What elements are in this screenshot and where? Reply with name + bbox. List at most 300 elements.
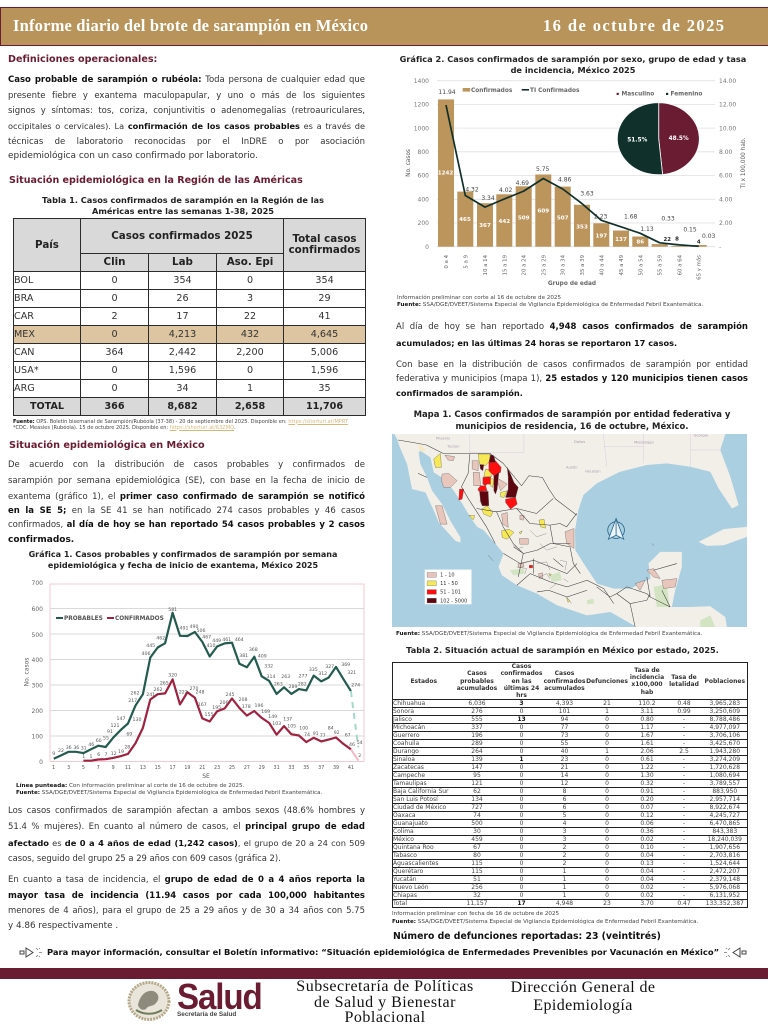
table 1: casos por país: 1,596 xyxy=(311,365,338,376)
table 2: situación por estado: 843,383 xyxy=(712,828,737,835)
chart 1: casos probables y confirmados por semana: 263 xyxy=(281,674,290,680)
chart 1: casos probables y confirmados por semana: 103 xyxy=(272,721,281,727)
table 2: situación por estado: 17 xyxy=(517,900,526,907)
chart 1: casos probables y confirmados por semana: 31 xyxy=(274,765,280,771)
table 2: situación por estado: 0.61 xyxy=(640,756,654,763)
chart 2: casos por grupo de edad, tasa de incidencia y sexo: TI Confirmados xyxy=(530,88,580,94)
map title: municipios de residencia, 16 de octubre, México. xyxy=(455,420,689,430)
chart 1: casos probables y confirmados por semana: 137 xyxy=(283,716,292,722)
table 2: situación por estado: 0.12 xyxy=(640,812,654,819)
chart 1: casos probables y confirmados por semana: 33 xyxy=(288,765,294,771)
chart 2: casos por grupo de edad, tasa de incidencia y sexo: 4.32 xyxy=(465,186,479,194)
table 2: situación por estado: hrs xyxy=(516,692,527,699)
table 2: situación por estado: 14 xyxy=(561,772,568,779)
chart 2: casos por grupo de edad, tasa de incidencia y sexo: No. casos xyxy=(406,149,412,177)
table 2: situación por estado: 21 xyxy=(603,700,611,707)
map title: Mapa 1. Casos confirmados de sarampión por entidad federativa y xyxy=(414,409,730,419)
chart 1: casos probables y confirmados por semana: 105 xyxy=(287,724,296,730)
text block: sexo y grupo de edad: 51.4 % mujeres). En cuanto al número de casos, el principal grupo de edad xyxy=(8,822,365,832)
table 2: situación por estado: 196 xyxy=(471,732,483,739)
chart 2: casos por grupo de edad, tasa de incidencia y sexo: 197 xyxy=(595,233,607,239)
chart 1: casos probables y confirmados por semana: 5 xyxy=(82,765,85,771)
table 2: situación por estado: 8 xyxy=(563,788,566,795)
chart 2: casos por grupo de edad, tasa de incidencia y sexo: 50 a 54 xyxy=(638,254,644,275)
chart 1: casos probables y confirmados por semana: 74 xyxy=(304,732,310,738)
table 2: situación por estado: Tamaulipas xyxy=(393,780,427,787)
table 2: situación por estado: 0 xyxy=(605,836,609,843)
chart 1: casos probables y confirmados por semana: 23 xyxy=(214,765,220,771)
table 2: situación por estado: en las xyxy=(511,678,532,685)
table 2: situación por estado: 0 xyxy=(605,716,609,723)
table 2: situación por estado: 3.70 xyxy=(640,900,654,907)
chart 1: casos probables y confirmados por semana: 222 xyxy=(179,690,188,696)
chart 1: casos probables y confirmados por semana: 400 xyxy=(32,657,43,664)
chart 2: casos por grupo de edad, tasa de incidencia y sexo: 4 xyxy=(697,240,701,246)
chart 1: casos probables y confirmados por semana: 35 xyxy=(303,765,309,771)
table 2: situación por estado: 2 xyxy=(563,852,566,859)
chart 1: casos probables y confirmados por semana: 130 xyxy=(133,717,141,723)
table 2: situación por estado: Aguascalientes xyxy=(393,860,438,867)
table 2: situación por estado: 40 xyxy=(561,748,568,755)
chart 2: casos por grupo de edad, tasa de incidencia y sexo: 1.68 xyxy=(624,214,638,220)
table 2: situación por estado: - xyxy=(683,828,685,835)
chart 1: casos probables y confirmados por semana: 335 xyxy=(309,667,318,673)
table 2: situación por estado: x100,000 xyxy=(631,681,663,688)
chart 2: casos por grupo de edad, tasa de incidencia y sexo: 367 xyxy=(479,223,491,229)
table 2: situación por estado: 0 xyxy=(520,708,523,715)
table 2: situación por estado: 0 xyxy=(520,764,523,771)
chart 2: casos por grupo de edad, tasa de incidencia y sexo: 442 xyxy=(498,219,510,225)
table 2: situación por estado: Querétaro xyxy=(393,868,423,875)
table 2: situación por estado: 1,080,694 xyxy=(709,772,740,779)
table 2: situación por estado: 4,245,727 xyxy=(709,812,740,819)
table 2: situación por estado: 1.30 xyxy=(640,772,654,779)
map: casos por municipio: Austin xyxy=(566,465,577,469)
table 1: casos por país: 17 xyxy=(176,311,189,322)
chart 2: casos por grupo de edad, tasa de incidencia y sexo: Confirmados xyxy=(471,88,513,94)
table 1 title xyxy=(42,195,324,216)
icon: megaphone right xyxy=(724,947,746,958)
table 1: casos por país: 1 xyxy=(247,383,253,394)
table 2: situación por estado: - xyxy=(683,796,685,803)
table 2: situación por estado: 101 xyxy=(559,708,570,715)
table 2: situación por estado: 1 xyxy=(605,708,609,715)
table 1: casos por país: 366 xyxy=(104,401,125,412)
table 1: casos por país: 0 xyxy=(111,365,118,376)
chart 1: casos probables y confirmados por semana: 406 xyxy=(142,651,150,657)
chart 1: casos probables y confirmados por semana: 1 xyxy=(82,754,85,760)
table 2: situación por estado: 4 xyxy=(563,820,566,827)
table 2: situación por estado: últimas 24 xyxy=(504,685,539,692)
table 2: situación por estado: 0 xyxy=(605,820,609,827)
chart 1: casos probables y confirmados por semana: 314 xyxy=(267,674,275,680)
table 1: casos por país: 2,658 xyxy=(235,401,265,412)
heading: definiciones operacionales: Definiciones operacionales: xyxy=(8,54,157,65)
table 2: situación por estado: 0 xyxy=(520,812,523,819)
chart 2 title xyxy=(400,54,746,75)
chart 2: casos por grupo de edad, tasa de incidencia y sexo xyxy=(406,78,747,287)
chart 2: casos por grupo de edad, tasa de incidencia y sexo: 1400 xyxy=(414,78,429,85)
table 1: casos por país: USA* xyxy=(14,365,39,376)
chart 2: casos por grupo de edad, tasa de incidencia y sexo: 25 a 29 xyxy=(541,254,547,275)
chart 2: casos por grupo de edad, tasa de incidencia y sexo: 200 xyxy=(418,220,429,227)
chart 2: casos por grupo de edad, tasa de incidencia y sexo: 14.00 xyxy=(719,78,736,85)
table 2: situación por estado: 0 xyxy=(520,724,523,731)
table 2: situación por estado: 77 xyxy=(561,724,568,731)
table 2: situación por estado: 1,720,628 xyxy=(709,764,740,771)
table 2: situación por estado: Tasa de xyxy=(671,674,697,681)
table 2: situación por estado: 3 xyxy=(563,836,566,843)
chart 2: casos por grupo de edad, tasa de incidencia y sexo: 10.00 xyxy=(719,125,736,132)
chart 1: casos probables y confirmados por semana: 274 xyxy=(351,682,360,688)
table 2: situación por estado: Ciudad de México xyxy=(393,804,446,811)
table 2: situación por estado: Baja California Sur xyxy=(393,788,449,795)
more information text: Para mayor información, consultar el Boletín informativo: “Situación epidemiológica de Enfermedades Prevenibles por Vacunación en México” xyxy=(47,947,719,957)
table 2: situación por estado: 0 xyxy=(605,804,609,811)
text block: definiciones: presente fiebre y exantema maculopapular, y uno o más de los siguientes xyxy=(8,91,365,101)
table 2: situación por estado: 0.02 xyxy=(640,836,654,843)
chart 2: casos por grupo de edad, tasa de incidencia y sexo: 6.00 xyxy=(719,173,733,180)
chart 1: casos probables y confirmados por semana: 11 xyxy=(125,765,131,771)
table 2: situación por estado: hab xyxy=(641,689,653,696)
table 2: situación por estado: Total xyxy=(393,900,407,907)
text block: situación México: confirmados. xyxy=(8,535,74,545)
chart 1: casos probables y confirmados por semana: 262 xyxy=(154,687,162,693)
table 2: situación por estado: 0 xyxy=(520,892,523,899)
chart 1: casos probables y confirmados por semana: 21 xyxy=(199,765,205,771)
chart 1: casos probables y confirmados por semana: 245 xyxy=(226,692,234,698)
table 2: situación por estado: 2.06 xyxy=(640,748,654,755)
table 2: situación por estado: - xyxy=(683,740,685,747)
table 2: situación por estado: 6 xyxy=(563,796,566,803)
chart 1: casos probables y confirmados por semana: CONFIRMADOS xyxy=(115,616,164,622)
text block: sexo y grupo de edad: Los casos confirmados de sarampión afectan a ambos sexos (48.6% hombres y xyxy=(8,806,365,816)
table 2: situación por estado: 0 xyxy=(520,804,523,811)
chart 1: casos probables y confirmados por semana: 155 xyxy=(205,712,213,718)
chart 1: casos probables y confirmados por semana: PROBABLES xyxy=(64,616,103,622)
table 2: situación por estado: probables xyxy=(460,678,494,685)
table 2: situación por estado: 0.13 xyxy=(640,860,654,867)
table 2: situación por estado: 1.61 xyxy=(640,740,654,747)
table 2: situación por estado: Tabasco xyxy=(393,852,417,859)
chart 2: casos por grupo de edad, tasa de incidencia y sexo: 1242 xyxy=(438,171,453,177)
text block: definiciones: técnicas de laboratorio reconocidas por el InDRE o por asociación xyxy=(8,137,365,147)
table 2: situación por estado: 0.48 xyxy=(677,700,691,707)
chart 2: casos por grupo de edad, tasa de incidencia y sexo: 0.03 xyxy=(702,233,716,240)
text block: definiciones xyxy=(8,74,365,161)
table 2: situación por estado: 5,976,068 xyxy=(709,884,740,891)
table 2: situación por estado: 3,425,670 xyxy=(709,740,740,747)
text block: casos acumulados: acumulados; en las últimas 24 horas se reportaron 17 casos. xyxy=(396,338,677,348)
table 2: situación por estado: 0 xyxy=(605,764,609,771)
table 2: situación por estado: 0.20 xyxy=(640,796,654,803)
table 2: situación por estado: 0 xyxy=(520,748,523,755)
chart 1: casos probables y confirmados por semana: 28 xyxy=(124,744,130,750)
chart 2: casos por grupo de edad, tasa de incidencia y sexo: 35 a 39 xyxy=(580,254,586,275)
table 2: situación por estado: 0 xyxy=(605,780,609,787)
chart 2: casos por grupo de edad, tasa de incidencia y sexo: Grupo de edad xyxy=(548,281,596,287)
chart 1: casos probables y confirmados por semana: 31 xyxy=(81,746,87,752)
table 2: situación por estado: 6,131,952 xyxy=(709,892,740,899)
table 2: situación por estado: acumulados xyxy=(544,685,585,692)
table 1: casos por país: 0 xyxy=(111,293,118,304)
chart 1: casos probables y confirmados por semana: 500 xyxy=(32,632,43,639)
chart 2: casos por grupo de edad, tasa de incidencia y sexo: 48.5% xyxy=(669,136,689,142)
table 2: situación por estado: San Luis Potosí xyxy=(393,796,438,803)
chart 1: casos probables y confirmados por semana: 1 xyxy=(52,765,55,771)
table 2: situación por estado: confirmados xyxy=(501,670,542,677)
table 1: casos por país: 11,706 xyxy=(306,401,343,412)
table 2: situación por estado: Casos xyxy=(512,663,531,670)
chart 1: casos probables y confirmados por semana: 41 xyxy=(348,765,354,771)
table 2: situación por estado: 3 xyxy=(519,700,524,707)
chart 1: casos probables y confirmados por semana: 3 xyxy=(67,765,70,771)
table 2 note xyxy=(392,910,698,925)
table 2: situación por estado: 256 xyxy=(471,884,483,891)
chart 2: casos por grupo de edad, tasa de incidencia y sexo: 0 a 4 xyxy=(444,254,450,269)
chart 2: casos por grupo de edad, tasa de incidencia y sexo: 86 xyxy=(636,239,644,245)
table 2: situación por estado: 147 xyxy=(471,764,483,771)
chart 1: casos probables y confirmados por semana: 46 xyxy=(88,742,94,748)
chart 1: casos probables y confirmados por semana: 13 xyxy=(140,765,146,771)
table 2: situación por estado: 0 xyxy=(605,844,609,851)
text block: estados y municipios xyxy=(396,360,748,398)
text block: sexo y grupo de edad xyxy=(8,806,365,863)
table 1 title: Américas entre las semanas 1-38, 2025 xyxy=(92,206,274,216)
chart 1: casos probables y confirmados por semana: 332 xyxy=(264,664,273,670)
chart 1: casos probables y confirmados por semana: 36 xyxy=(73,745,79,751)
table 2: situación por estado: 3.11 xyxy=(640,708,654,715)
chart 1: casos probables y confirmados por semana: 167 xyxy=(198,702,207,708)
chart 1: casos probables y confirmados por semana: 289 xyxy=(289,684,297,690)
text block: tasa de incidencia xyxy=(8,875,365,931)
chart 1: casos probables y confirmados por semana: 17 xyxy=(170,765,176,771)
text block: estados y municipios: federativa y municipios (mapa 1), 25 estados y 120 municipios tienen casos xyxy=(396,374,748,384)
table 1 source note xyxy=(13,418,348,431)
table 1: casos por país: Clin xyxy=(104,256,125,268)
logo: Salud: Salud xyxy=(177,976,262,1017)
table 2: situación por estado: 0.99 xyxy=(677,708,691,715)
chart 2: casos por grupo de edad, tasa de incidencia y sexo: 2.23 xyxy=(594,214,608,220)
table 2: situación por estado: 1.22 xyxy=(640,764,654,771)
table 2: situación por estado: Oaxaca xyxy=(393,812,416,819)
chart 1: casos probables y confirmados por semana: 270 xyxy=(190,686,198,692)
table 2: situación por estado: 883,950 xyxy=(712,788,737,795)
table 2: situación por estado: 0.47 xyxy=(677,900,691,907)
table 1: casos por país: 1,596 xyxy=(169,365,196,376)
chart 2: casos por grupo de edad, tasa de incidencia y sexo: 1200 xyxy=(414,102,429,109)
chart 1: casos probables y confirmados por semana: 241 xyxy=(146,692,155,698)
table 2: situación por estado: 32 xyxy=(473,892,481,899)
chart 2: casos por grupo de edad, tasa de incidencia y sexo: 400 xyxy=(418,196,429,204)
chart 1: casos probables y confirmados por semana: 39 xyxy=(333,765,339,771)
table 2: situación por estado: 0.04 xyxy=(640,852,654,859)
table 2 note: Fuente: SSA/DGE/DVEET/Sistema Especial de Vigilancia Epidemiológica de Enfermedad Febril Exantemática. xyxy=(392,919,698,925)
chart 1: casos probables y confirmados por semana: 262 xyxy=(131,690,139,696)
map: casos por municipio: Phoenix xyxy=(436,436,451,440)
table 2: situación por estado: confirmados xyxy=(544,678,585,685)
table 2: situación por estado: 0 xyxy=(605,796,609,803)
header banner: 16 de octubre de 2025 xyxy=(543,16,724,35)
chart 1: casos probables y confirmados por semana: 0 xyxy=(39,759,43,766)
table 2: situación por estado: 13 xyxy=(517,716,526,723)
chart 2 title: de incidencia, México 2025 xyxy=(511,65,635,75)
table 1: casos por país: CAR xyxy=(14,311,34,322)
text block: definiciones: occipitales o cervicales). La confirmación de los casos probables es a través de xyxy=(8,121,365,131)
chart 2 title: Gráfica 2. Casos confirmados de sarampión por sexo, grupo de edad y tasa xyxy=(400,54,746,64)
table 2: situación por estado: 2,703,816 xyxy=(709,852,740,859)
table 2: situación por estado: Quintana Roo xyxy=(393,844,434,851)
chart 1: casos probables y confirmados por semana: 462 xyxy=(156,636,165,642)
table 2: situación por estado: 5 xyxy=(563,812,566,819)
table 1: casos por país: Aso. Epi xyxy=(227,256,273,268)
table 2: situación por estado: 0 xyxy=(520,876,523,883)
table 2: situación por estado: - xyxy=(683,836,685,843)
chart 1: casos probables y confirmados por semana: 2 xyxy=(358,753,361,759)
chart 1: casos probables y confirmados por semana: 461 xyxy=(222,637,231,643)
chart 1: casos probables y confirmados por semana: 248 xyxy=(196,690,204,696)
table 2: situación por estado: 95 xyxy=(473,772,481,779)
table 2: situación por estado: 0.04 xyxy=(640,876,654,883)
table 2: situación por estado: 80 xyxy=(473,852,481,859)
chart 1: casos probables y confirmados por semana: 327 xyxy=(325,664,334,670)
table 2: situación por estado: 94 xyxy=(561,716,568,723)
chart 1 title: Gráfica 1. Casos probables y confirmados de sarampión por semana xyxy=(29,550,337,559)
table 1: casos por país: TOTAL xyxy=(30,401,64,412)
table 2: situación por estado: 555 xyxy=(471,716,483,723)
chart 1: casos probables y confirmados por semana: 92 xyxy=(334,730,340,736)
table 1: casos por país: 4,645 xyxy=(311,329,338,340)
table 2: situación por estado: 0.80 xyxy=(640,716,654,723)
table 2: situación por estado: 0.36 xyxy=(640,828,654,835)
table 2: situación por estado: 3,250,609 xyxy=(709,708,740,715)
text block: tasa de incidencia: mayor tasa de incidencia (11.94 casos por cada 100,000 habitantes xyxy=(8,891,365,901)
chart 1 note: Línea punteada: Con información preliminar al corte de 16 de octubre de 2025. xyxy=(16,782,244,788)
icon: megaphone left xyxy=(20,947,42,958)
chart 2: casos por grupo de edad, tasa de incidencia y sexo: 40 a 44 xyxy=(599,254,605,275)
table 2: situación por estado: - xyxy=(683,844,685,851)
table 2: situación por estado: 1 xyxy=(519,756,524,763)
chart 1: casos probables y confirmados por semana xyxy=(24,580,364,780)
table 2: situación por estado: Durango xyxy=(393,748,419,755)
chart 1: casos probables y confirmados por semana: 300 xyxy=(32,682,43,690)
table 2: situación por estado: Nuevo León xyxy=(393,884,429,891)
table 2: situación por estado: 55 xyxy=(561,740,568,747)
chart 1: casos probables y confirmados por semana: 29 xyxy=(259,765,265,771)
table 1: casos por país: 22 xyxy=(244,311,256,322)
text block: casos acumulados: Al día de hoy se han reportado 4,948 casos confirmados de sarampión xyxy=(396,322,748,332)
text block: definiciones: epidemiológica con un caso confirmado por laboratorio. xyxy=(8,151,258,161)
chart 1: casos probables y confirmados por semana: 9 xyxy=(52,751,55,757)
table 2: situación por estado: 2,379,148 xyxy=(709,876,740,883)
chart 1: casos probables y confirmados por semana: 600 xyxy=(32,606,43,613)
map: casos por municipio: 102 - 5000 xyxy=(440,598,467,604)
table 2: situación por estado: 6,036 xyxy=(468,700,486,707)
table 1: casos por país: 2,200 xyxy=(236,347,264,358)
chart 1: casos probables y confirmados por semana: 147 xyxy=(117,716,125,722)
table 2: situación por estado: Campeche xyxy=(393,772,425,779)
chart 2: casos por grupo de edad, tasa de incidencia y sexo: 8 xyxy=(675,236,679,242)
table 1: casos por país: 354 xyxy=(315,275,334,286)
chart 2: casos por grupo de edad, tasa de incidencia y sexo: 4.00 xyxy=(719,196,733,204)
chart 1: casos probables y confirmados por semana: 25 xyxy=(229,765,235,771)
table 2: situación por estado: 1 xyxy=(563,876,566,883)
table 2: situación por estado: 1 xyxy=(605,748,609,755)
table 2: situación por estado: 2,957,714 xyxy=(709,796,740,803)
text block: tasa de incidencia: y 4.86 respectivamente . xyxy=(8,921,118,931)
table 2: situación por estado: 139 xyxy=(471,756,483,763)
footer band xyxy=(0,968,768,979)
table 2: situación por estado: Casos xyxy=(467,670,487,677)
table 1: casos por país xyxy=(13,218,366,416)
chart 1: casos probables y confirmados por semana: 581 xyxy=(168,607,177,613)
chart 1: casos probables y confirmados por semana: 195 xyxy=(212,705,221,711)
chart 1: casos probables y confirmados por semana: SE xyxy=(202,773,210,780)
chart 2: casos por grupo de edad, tasa de incidencia y sexo: 20 a 24 xyxy=(522,254,528,275)
chart 2: casos por grupo de edad, tasa de incidencia y sexo: 509 xyxy=(518,215,530,221)
table 2: situación por estado: 134 xyxy=(471,796,483,803)
deaths count: Número de defunciones reportadas: 23 (veintitrés) xyxy=(393,931,661,942)
table 2: situación por estado: Colima xyxy=(393,828,414,835)
table 2: situación por estado: 459 xyxy=(471,836,483,843)
chart 1: casos probables y confirmados por semana: 208 xyxy=(239,697,247,703)
table 2: situación por estado: 289 xyxy=(471,740,483,747)
table 2: situación por estado: 2 xyxy=(563,860,566,867)
chart 1: casos probables y confirmados por semana: 12 xyxy=(111,751,117,757)
chart 1: casos probables y confirmados por semana: 196 xyxy=(255,703,263,709)
text block: estados y municipios: Con base en la distribución de casos confirmados de sarampión por entidad xyxy=(396,360,748,370)
table 2: situación por estado: acumulados xyxy=(457,685,497,692)
table 2: situación por estado: 0 xyxy=(605,812,609,819)
table 2: situación por estado: 67 xyxy=(473,844,481,851)
table 1: casos por país: 432 xyxy=(241,329,259,340)
chart 1: casos probables y confirmados por semana: 77 xyxy=(320,733,326,739)
chart 2: casos por grupo de edad, tasa de incidencia y sexo: 10 a 14 xyxy=(483,254,489,275)
table 1 title: Tabla 1. Casos confirmados de sarampión en la Región de las xyxy=(42,195,324,205)
chart 2: casos por grupo de edad, tasa de incidencia y sexo: 800 xyxy=(418,149,429,156)
table 2: situación por estado: 115 xyxy=(471,860,483,867)
table 1: casos por país: 0 xyxy=(247,275,253,286)
chart 2: casos por grupo de edad, tasa de incidencia y sexo: Masculino xyxy=(622,92,654,98)
chart 2: casos por grupo de edad, tasa de incidencia y sexo: 30 a 34 xyxy=(561,254,567,275)
chart 2: casos por grupo de edad, tasa de incidencia y sexo: 0.15 xyxy=(683,226,697,234)
chart 1: casos probables y confirmados por semana: 36 xyxy=(66,745,72,751)
table 1 source note: Fuente: OPS. Boletín bisemanal de Sarampión/Rubéola (37-38) - 20 de septiembre del 2025. Disponible en: https://shorturl.at/MPRT xyxy=(13,418,348,424)
table 2: situación por estado: 727 xyxy=(471,804,483,811)
table 2: situación por estado: 1 xyxy=(563,892,566,899)
table 2: situación por estado: 0 xyxy=(520,788,523,795)
chart 1: casos probables y confirmados por semana: 19 xyxy=(184,765,190,771)
table 2: situación por estado: - xyxy=(683,732,685,739)
table 2: situación por estado: Guanajuato xyxy=(393,820,428,827)
table 2: situación por estado: Chihuahua xyxy=(393,700,425,707)
table 2: situación por estado: - xyxy=(683,812,685,819)
chart 2: casos por grupo de edad, tasa de incidencia y sexo: 137 xyxy=(615,237,627,243)
chart 1: casos probables y confirmados por semana: 200 xyxy=(32,708,43,715)
chart 1: casos probables y confirmados por semana: 1 xyxy=(90,754,93,760)
text block: tasa de incidencia: En cuanto a tasa de incidencia, el grupo de edad de 0 a 4 años reporta la xyxy=(8,875,365,885)
chart 2 note: Fuente: SSA/DGE/DVEET/Sistema Especial de Vigilancia Epidemiológica de Enfermedad Febril Exantemática. xyxy=(397,302,703,308)
table 1: casos por país: 354 xyxy=(173,275,192,286)
chart 2: casos por grupo de edad, tasa de incidencia y sexo: 3.63 xyxy=(580,190,594,198)
footer: subsecretaría: Subsecretaría de Políticas xyxy=(296,978,474,995)
table 2: situación por estado: - xyxy=(683,884,685,891)
table 1: casos por país: confirmados xyxy=(289,244,360,256)
chart 1: casos probables y confirmados por semana: 60 xyxy=(96,738,102,744)
text block: tasa de incidencia: menores de 4 años), para el grupo de 25 a 29 años y de 30 a 34 años con 5.75 xyxy=(8,906,365,916)
chart 1: casos probables y confirmados por semana: 490 xyxy=(190,624,198,630)
table 1: casos por país: País xyxy=(35,238,59,250)
